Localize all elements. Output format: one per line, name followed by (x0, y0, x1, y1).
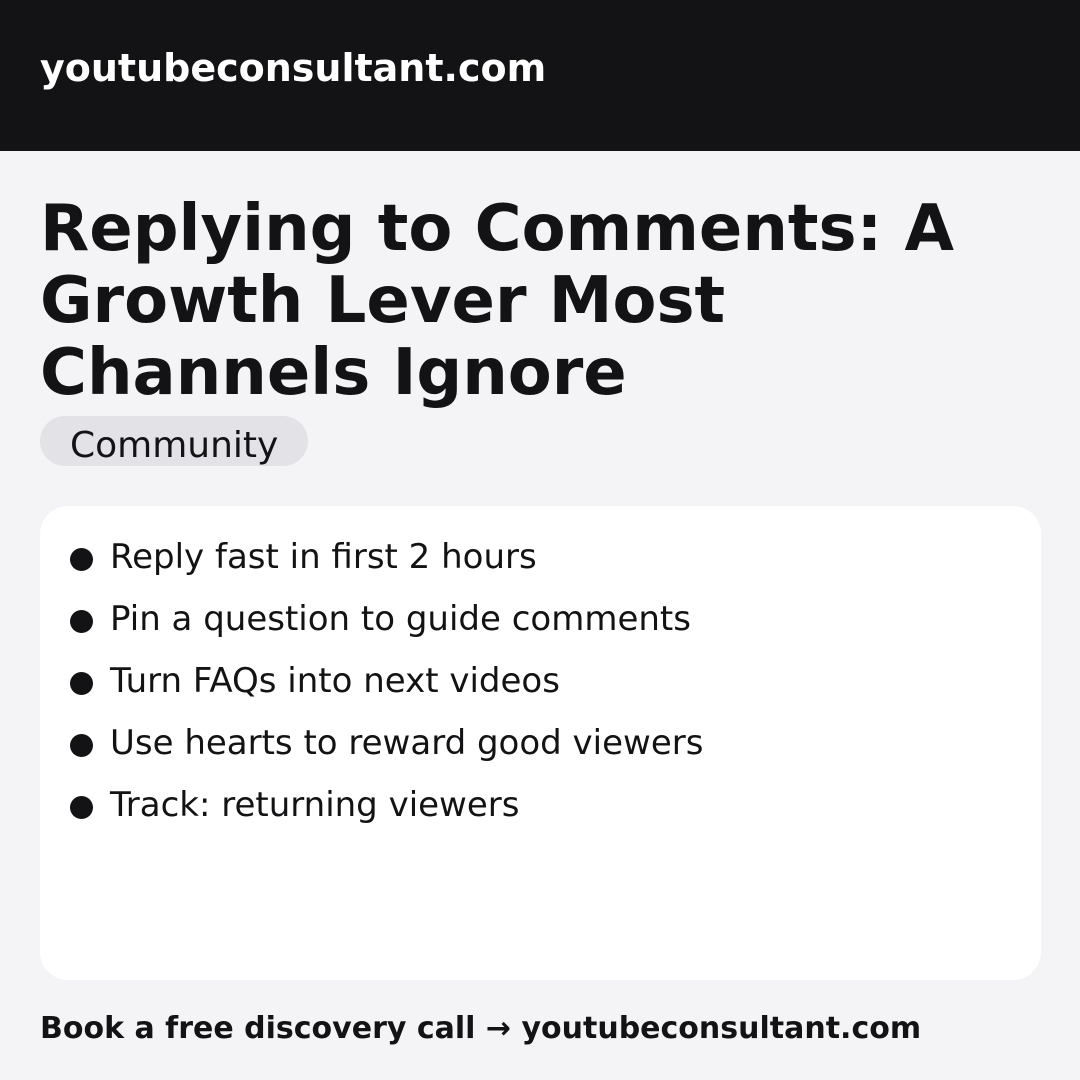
header bar (0, 0, 1080, 151)
title (40, 192, 954, 410)
footer call to action: Book a free discovery call → youtubeconsultant.com (40, 1011, 921, 1046)
title: Replying to Comments: A (40, 192, 954, 266)
title: Growth Lever Most (40, 264, 725, 338)
bullet: track: Track: returning viewers (110, 785, 519, 825)
category pill: Community (70, 425, 278, 466)
bullet: pin question: Pin a question to guide comments (110, 599, 691, 639)
bullet: reply fast: Reply fast in first 2 hours (110, 537, 537, 577)
title: Channels Ignore (40, 336, 627, 410)
brand name: youtubeconsultant.com (40, 46, 546, 90)
panel: tips list (40, 506, 1041, 980)
category pill (40, 416, 308, 466)
bullet: hearts: Use hearts to reward good viewers (110, 723, 703, 763)
bullet: FAQs: Turn FAQs into next videos (110, 661, 560, 701)
